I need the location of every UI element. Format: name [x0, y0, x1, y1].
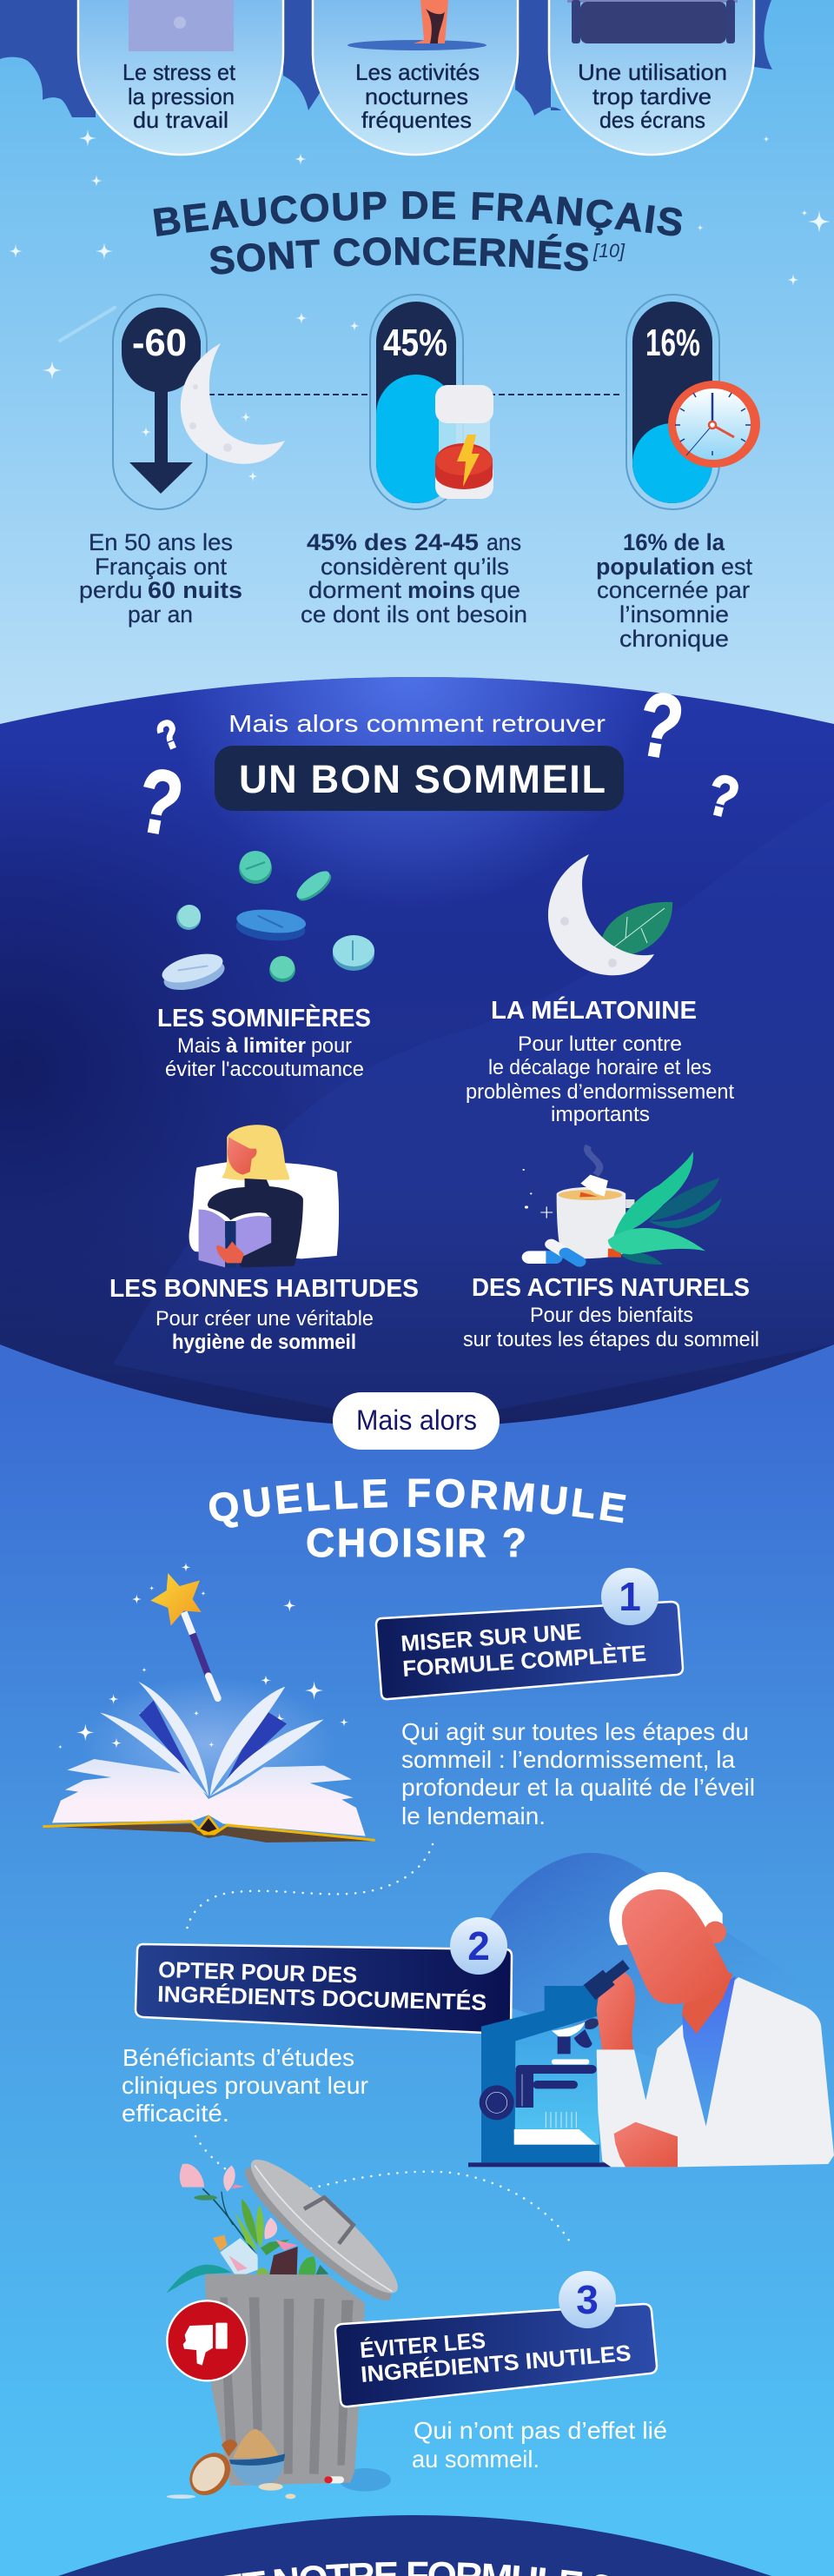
- text: column 3: est: [721, 554, 752, 580]
- card: stress: [78, 0, 283, 155]
- heading pill: UN BON SOMMEIL: [239, 757, 606, 801]
- backdrop: dome behind scientist: [486, 1853, 817, 2103]
- hand: [614, 2122, 678, 2167]
- dotted path 1 to 2: [186, 1844, 433, 1934]
- text: column 1: par an: [128, 601, 193, 627]
- panel: notre formule: [58, 2515, 771, 2576]
- background: sky: [0, 0, 834, 782]
- shooting star: [60, 308, 115, 341]
- text: bonnes habitudes: hygiène de sommeil: [172, 1331, 356, 1354]
- text: somnifères: [157, 1003, 371, 1081]
- text: stress: [122, 59, 236, 133]
- icon: battery: [435, 385, 493, 499]
- shirt: [682, 1975, 736, 2127]
- text: actifs naturels: [463, 1274, 759, 1351]
- step 1 box: [376, 1568, 683, 1699]
- step 1 number: 1: [619, 1574, 641, 1619]
- step 2 text: Bénéficiants d’études: [122, 2044, 354, 2071]
- text: mélatonine: LA MÉLATONINE: [491, 995, 697, 1025]
- text: stress: Le stress et: [122, 59, 236, 85]
- book cover: [43, 1823, 375, 1842]
- heading: quelle formule choisir: CHOISIR ?: [306, 1520, 526, 1565]
- text: column 2: ce dont ils ont besoin: [301, 601, 527, 627]
- icon: laptop: [129, 0, 234, 51]
- icon: sleeping pills: [159, 851, 374, 996]
- microscope: [468, 1979, 611, 2167]
- glow behind book: [81, 1677, 336, 1810]
- powder bowl and scoop: [167, 2429, 344, 2503]
- text: stress: la pression: [128, 83, 235, 110]
- text: column 1: 60 nuits: [148, 577, 242, 603]
- text: column 2: ans: [486, 529, 521, 555]
- text: actifs naturels: sur toutes les étapes du sommeil: [463, 1328, 759, 1351]
- text: stress: du travail: [133, 107, 228, 133]
- icon: clock: [668, 381, 760, 468]
- heading pill: [215, 746, 624, 811]
- icon: moon and leaf: [548, 854, 672, 975]
- number: 45%: [383, 322, 447, 364]
- illustration: scientist and microscope: [468, 1872, 834, 2167]
- step 3 title: INGRÉDIENTS INUTILES: [360, 2340, 632, 2387]
- text: activities: nocturnes: [365, 83, 468, 110]
- heading: beaucoup de français: [153, 148, 688, 275]
- step 2 text: efficacité.: [122, 2100, 229, 2127]
- capsule: 16 percent: [626, 295, 760, 509]
- capsule: minus 60: [113, 295, 285, 509]
- icon: tea and leaves: [522, 1145, 721, 1265]
- text: activities: [355, 59, 480, 133]
- text: column 2: [301, 529, 527, 627]
- panel: un bon sommeil: [0, 672, 834, 1427]
- heading: quelle formule choisir: QUELLE FORMULE: [208, 1479, 626, 1528]
- illustration: wand and open book: [43, 1563, 375, 1842]
- text: somnifères: Mais: [177, 1034, 221, 1058]
- heading: beaucoup de français: SONT CONCERNÉS: [210, 233, 588, 275]
- question marks: ?: [701, 761, 745, 831]
- dashed connector: [208, 394, 623, 395]
- text: mélatonine: le décalage horaire et les: [488, 1056, 712, 1079]
- text: actifs naturels: DES ACTIFS NATURELS: [472, 1274, 750, 1302]
- text: mélatonine: Pour lutter contre: [518, 1032, 682, 1056]
- step 3 text: Qui n’ont pas d’effet lié: [414, 2417, 667, 2444]
- dark gaps between pages: [139, 1701, 191, 1775]
- step 1 text: sommeil : l’endormissement, la: [401, 1746, 735, 1773]
- text: bonnes habitudes: [109, 1275, 419, 1354]
- number: -60: [132, 322, 187, 364]
- step 1 text: [401, 1718, 755, 1829]
- stars around wand and book: [58, 1563, 348, 1749]
- text: column 1: Français ont: [95, 554, 227, 580]
- step 3 number: [559, 2271, 616, 2328]
- icon: woman reading: [189, 1125, 339, 1267]
- heading: quelle formule choisir: [208, 1479, 626, 1565]
- step 2 box: [136, 1917, 512, 2034]
- text: column 3: l’insomnie: [619, 601, 729, 627]
- text: column 1: [79, 529, 242, 627]
- step 1 title: [400, 1618, 647, 1682]
- step 3 text: [412, 2417, 667, 2473]
- step 3 number: 3: [576, 2277, 599, 2322]
- can body: [205, 2274, 365, 2486]
- question marks: ?: [130, 748, 190, 855]
- lid: [234, 2146, 410, 2313]
- heading: beaucoup de français: [10]: [592, 240, 626, 262]
- arrow: [122, 308, 201, 494]
- ground shadow: [339, 2468, 391, 2492]
- text: column 1: perdu: [79, 577, 142, 603]
- text: column 3: population: [596, 554, 715, 580]
- intro text: Mais alors comment retrouver: [228, 710, 606, 737]
- plants and bottle: [167, 2164, 328, 2293]
- step 2 title: INGRÉDIENTS DOCUMENTÉS: [157, 1981, 486, 2015]
- button: mais alors: [333, 1392, 500, 1450]
- step 1 number: [601, 1568, 659, 1625]
- capsule: 45 percent: [370, 295, 493, 509]
- text: actifs naturels: Pour des bienfaits: [530, 1304, 693, 1327]
- step 1 title: FORMULE COMPLÈTE: [401, 1640, 647, 1682]
- step 1 text: profondeur et la qualité de l’éveil: [401, 1774, 755, 1801]
- upright pages: [100, 1682, 324, 1796]
- number: 16%: [645, 322, 700, 364]
- step 2 title: [157, 1956, 486, 2015]
- head and neck: [609, 1872, 732, 2034]
- text: column 3: [596, 529, 752, 652]
- step 1 text: Qui agit sur toutes les étapes du: [401, 1718, 749, 1745]
- page block: [52, 1759, 366, 1836]
- text: column 3: 16% de la: [623, 529, 725, 555]
- text: somnifères: pour: [311, 1034, 352, 1058]
- text: somnifères: à limiter: [226, 1034, 306, 1058]
- step 3 title: ÉVITER LES: [359, 2327, 486, 2363]
- text: column 1: En 50 ans les: [89, 529, 233, 555]
- stars: top sky: [9, 127, 831, 481]
- text: activities: fréquentes: [361, 107, 472, 133]
- text: mélatonine: [466, 995, 734, 1126]
- step 3 text: au sommeil.: [412, 2446, 539, 2473]
- text: column 2: moins: [407, 577, 475, 603]
- lab coat: [597, 1977, 834, 2167]
- card: night activities: [313, 0, 518, 155]
- icon: crescent moon: [181, 343, 285, 464]
- text: column 2: 45% des 24-45: [307, 529, 479, 555]
- text: bonnes habitudes: LES BONNES HABITUDES: [109, 1275, 419, 1303]
- text: column 3: chronique: [619, 626, 729, 652]
- step 1 text: le lendemain.: [401, 1803, 546, 1829]
- step 2 title: OPTER POUR DES: [158, 1956, 358, 1988]
- text: somnifères: éviter l'accoutumance: [165, 1058, 364, 1081]
- text: column 2: considèrent qu’ils: [321, 554, 509, 580]
- icon: legs and shadow: [348, 0, 486, 50]
- question marks: ?: [631, 672, 691, 779]
- scientist arm and eyepiece: [584, 1956, 635, 2051]
- dotted path trash to 3: [311, 2172, 572, 2245]
- text: screens: trop tardive: [592, 83, 712, 110]
- step 2 number: [450, 1917, 507, 1975]
- text: bonnes habitudes: Pour créer une véritable: [156, 1307, 374, 1331]
- step 2 text: [122, 2044, 368, 2127]
- text: activities: Les activités: [355, 59, 480, 85]
- text: mélatonine: importants: [551, 1103, 650, 1126]
- text: column 2: dorment: [308, 577, 402, 603]
- step 1 title: MISER SUR UNE: [400, 1618, 582, 1656]
- night clouds behind the cards: [0, 0, 772, 117]
- text: screens: des écrans: [599, 107, 705, 133]
- step 3 box: [335, 2271, 657, 2407]
- step 2 number: 2: [467, 1923, 490, 1969]
- text: mélatonine: problèmes d’endormissement: [466, 1080, 734, 1104]
- question marks: ?: [151, 711, 187, 760]
- heading: beaucoup de français: BEAUCOUP DE FRANÇAIS: [153, 191, 683, 236]
- illustration: trash can: [167, 2146, 410, 2503]
- step 2 text: cliniques prouvant leur: [122, 2072, 368, 2099]
- badge: thumbs down: [167, 2300, 247, 2380]
- card: screens: [549, 0, 754, 155]
- question marks: [130, 672, 745, 855]
- wand: [150, 1573, 218, 1698]
- text: column 2: que: [480, 577, 520, 603]
- button: mais alors: Mais alors: [356, 1404, 477, 1436]
- background: lower blue area: [0, 1304, 834, 2576]
- text: screens: [578, 59, 727, 133]
- dotted path 2 to trash: [195, 2136, 226, 2169]
- text: column 3: concernée par: [597, 577, 750, 603]
- icon: sofa: [567, 0, 738, 43]
- text: screens: Une utilisation: [578, 59, 727, 85]
- text: somnifères: LES SOMNIFÈRES: [157, 1003, 371, 1032]
